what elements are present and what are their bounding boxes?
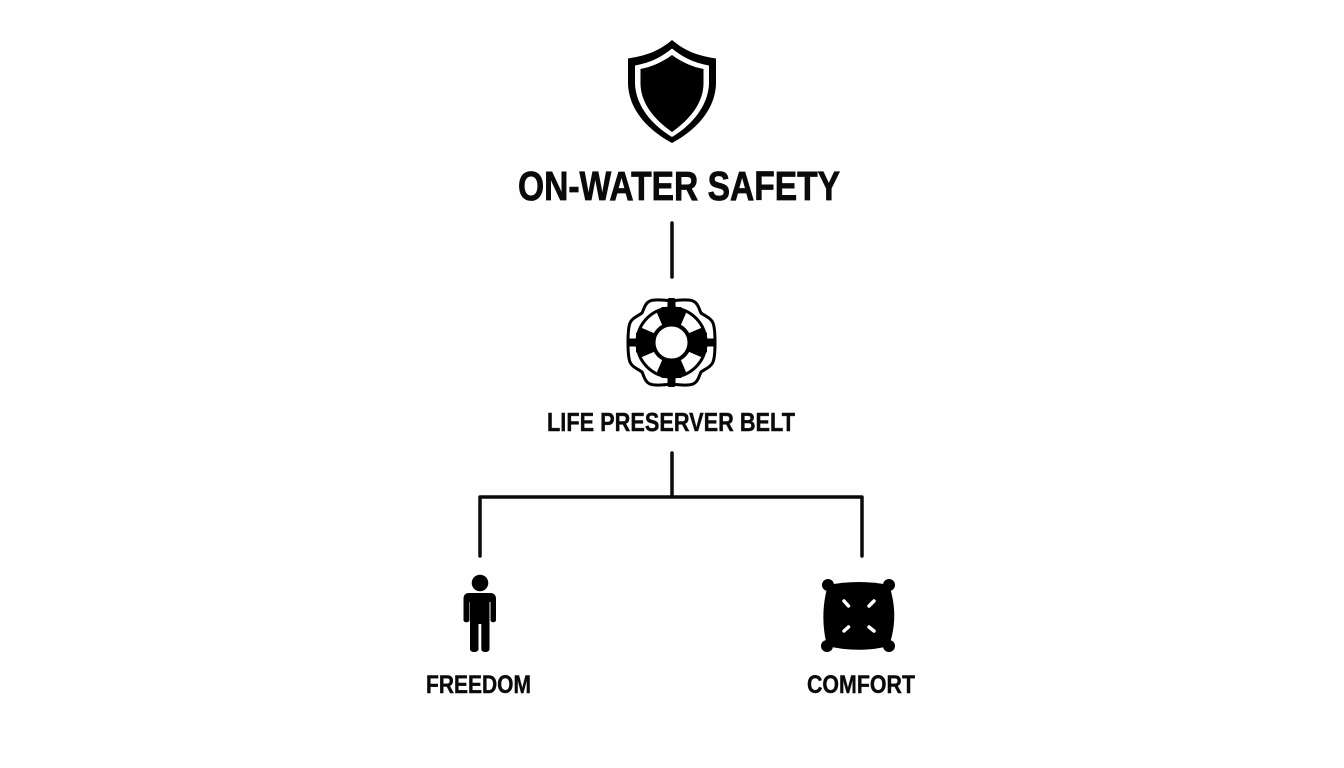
label: comfort: COMFORT — [807, 671, 915, 699]
connector: title to life preserver — [670, 223, 674, 277]
label: life preserver belt: LIFE PRESERVER BELT — [547, 407, 795, 437]
icon: person — [464, 575, 496, 652]
icon: life preserver — [627, 298, 716, 387]
connector: branching tree — [480, 453, 862, 556]
label: freedom: FREEDOM — [426, 671, 531, 699]
icon: shield — [628, 40, 716, 143]
title: ON-WATER SAFETY — [518, 163, 840, 209]
icon: pillow — [821, 579, 895, 652]
